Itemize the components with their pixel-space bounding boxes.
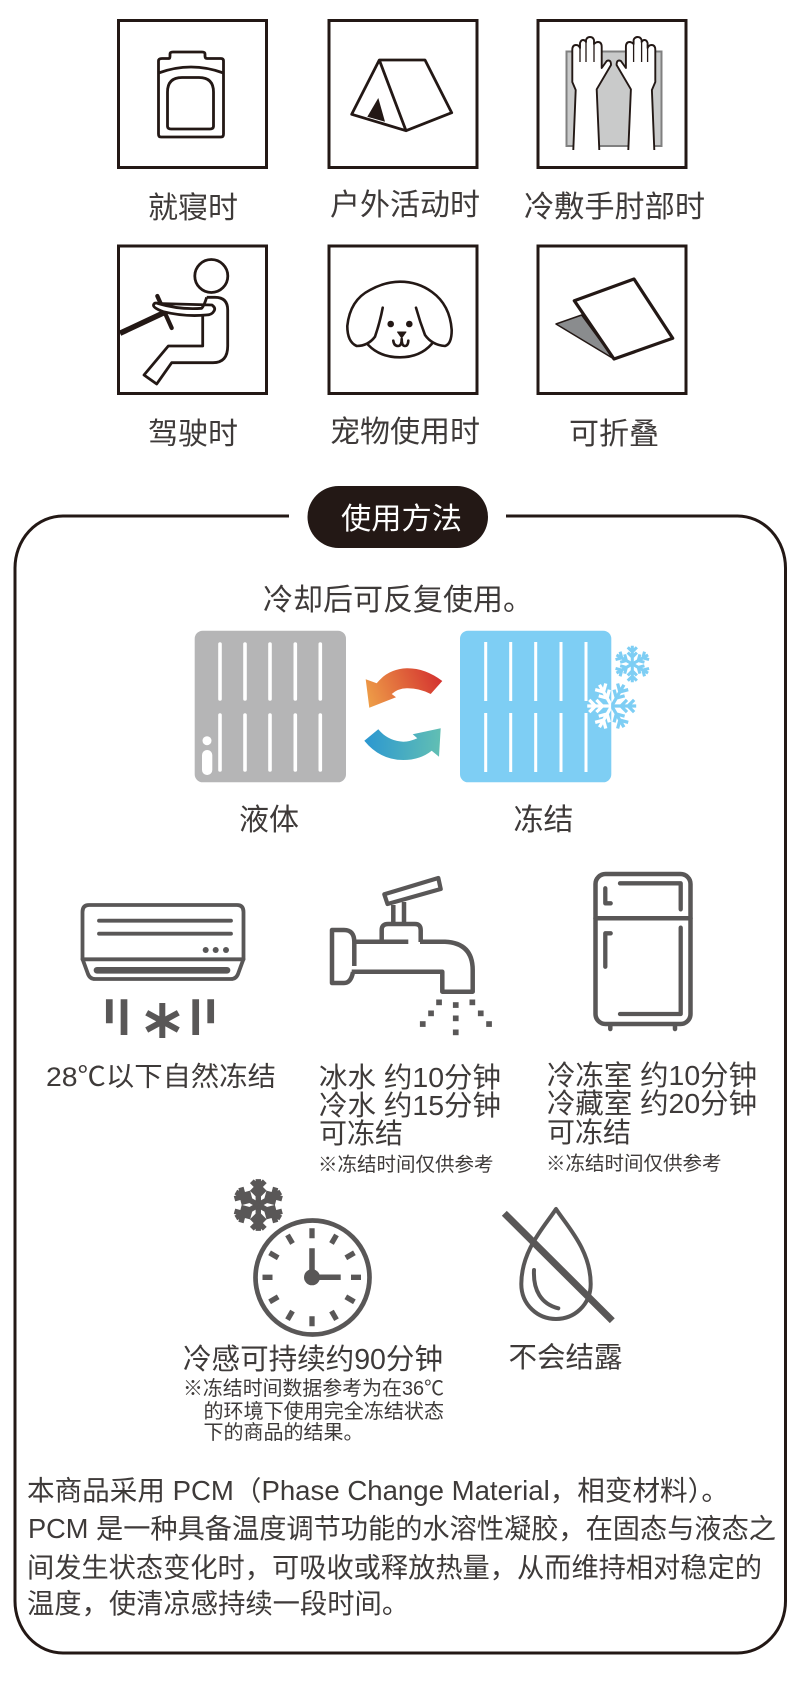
icon: large snowflake — [587, 682, 636, 730]
heading pill: 使用方法 — [341, 503, 462, 536]
label: foldable: 可折叠 — [569, 418, 659, 451]
text: fridge times: 冷冻室 约10分钟 — [547, 1060, 757, 1091]
card: cold compress — [524, 20, 705, 224]
label: cold compress: 冷敷手肘部时 — [524, 191, 705, 224]
heading pill — [308, 486, 488, 548]
text: PCM description: 间发生状态变化时，可吸收或释放热量，从而维持相对稳定的 — [27, 1552, 762, 1583]
card: driving — [118, 246, 266, 451]
text: tap water times: 可冻结 — [319, 1118, 403, 1149]
arrow: cooling — [364, 728, 441, 760]
icon: liquid sheet — [195, 631, 346, 782]
icon: faucet — [332, 878, 492, 1035]
text: PCM description: PCM 是一种具备温度调节功能的水溶性凝胶，在固态与液态之 — [28, 1513, 776, 1544]
icon: clock — [256, 1220, 370, 1334]
card: foldable — [538, 246, 686, 451]
text: PCM description — [27, 1475, 776, 1619]
label: pets: 宠物使用时 — [330, 416, 480, 449]
icon: frozen sheet — [460, 631, 611, 782]
icon: folded sheet — [556, 279, 673, 359]
icon: hands on pad — [566, 37, 662, 150]
label: frozen: 冻结 — [514, 804, 574, 837]
label: outdoor: 户外活动时 — [330, 189, 480, 222]
icon: sleeping bag — [158, 52, 224, 137]
card: pets — [329, 246, 480, 449]
label: sleeping: 就寝时 — [148, 192, 238, 225]
text: PCM description: 温度，使清凉感持续一段时间。 — [27, 1588, 409, 1619]
text: tap water times: 冷水 约15分钟 — [319, 1090, 501, 1121]
icon: refrigerator — [596, 874, 690, 1029]
panel: usage — [15, 486, 786, 1653]
text: reusable: 冷却后可反复使用。 — [263, 584, 533, 617]
text: tap water times — [319, 1062, 501, 1149]
arrow: warming — [366, 668, 442, 708]
label: liquid: 液体 — [239, 804, 299, 837]
icon: air conditioner — [82, 905, 244, 1038]
panel border — [15, 516, 786, 1653]
label: driving: 驾驶时 — [148, 418, 238, 451]
icon: no condensation — [504, 1209, 612, 1321]
icon: small snowflake — [614, 646, 650, 682]
text: fridge times — [547, 1060, 757, 1148]
note: fridge: ※冻结时间仅供参考 — [546, 1153, 722, 1175]
icon: snowflake — [233, 1179, 284, 1231]
label: no condensation: 不会结露 — [508, 1342, 623, 1374]
text: PCM description: 本商品采用 PCM（Phase Change Material，相变材料）。 — [27, 1475, 729, 1506]
card: sleeping — [118, 20, 266, 225]
icon: dog — [347, 282, 452, 357]
label: natural freezing: 28℃以下自然冻结 — [46, 1062, 276, 1092]
note: duration — [183, 1377, 444, 1444]
note: duration: 的环境下使用完全冻结状态 — [204, 1400, 444, 1423]
icon: driver — [120, 260, 228, 384]
note: duration: ※冻结时间数据参考为在36℃ — [183, 1377, 444, 1400]
icon: tent — [352, 60, 452, 131]
panel: use cases — [118, 20, 705, 451]
text: fridge times: 冷藏室 约20分钟 — [547, 1088, 757, 1119]
text: tap water times: 冰水 约10分钟 — [319, 1062, 501, 1093]
note: duration: 下的商品的结果。 — [204, 1421, 364, 1444]
text: fridge times: 可冻结 — [547, 1117, 631, 1148]
card: outdoor — [329, 20, 480, 222]
note: tap water: ※冻结时间仅供参考 — [318, 1154, 494, 1176]
label: cooling duration: 冷感可持续约90分钟 — [183, 1343, 443, 1376]
